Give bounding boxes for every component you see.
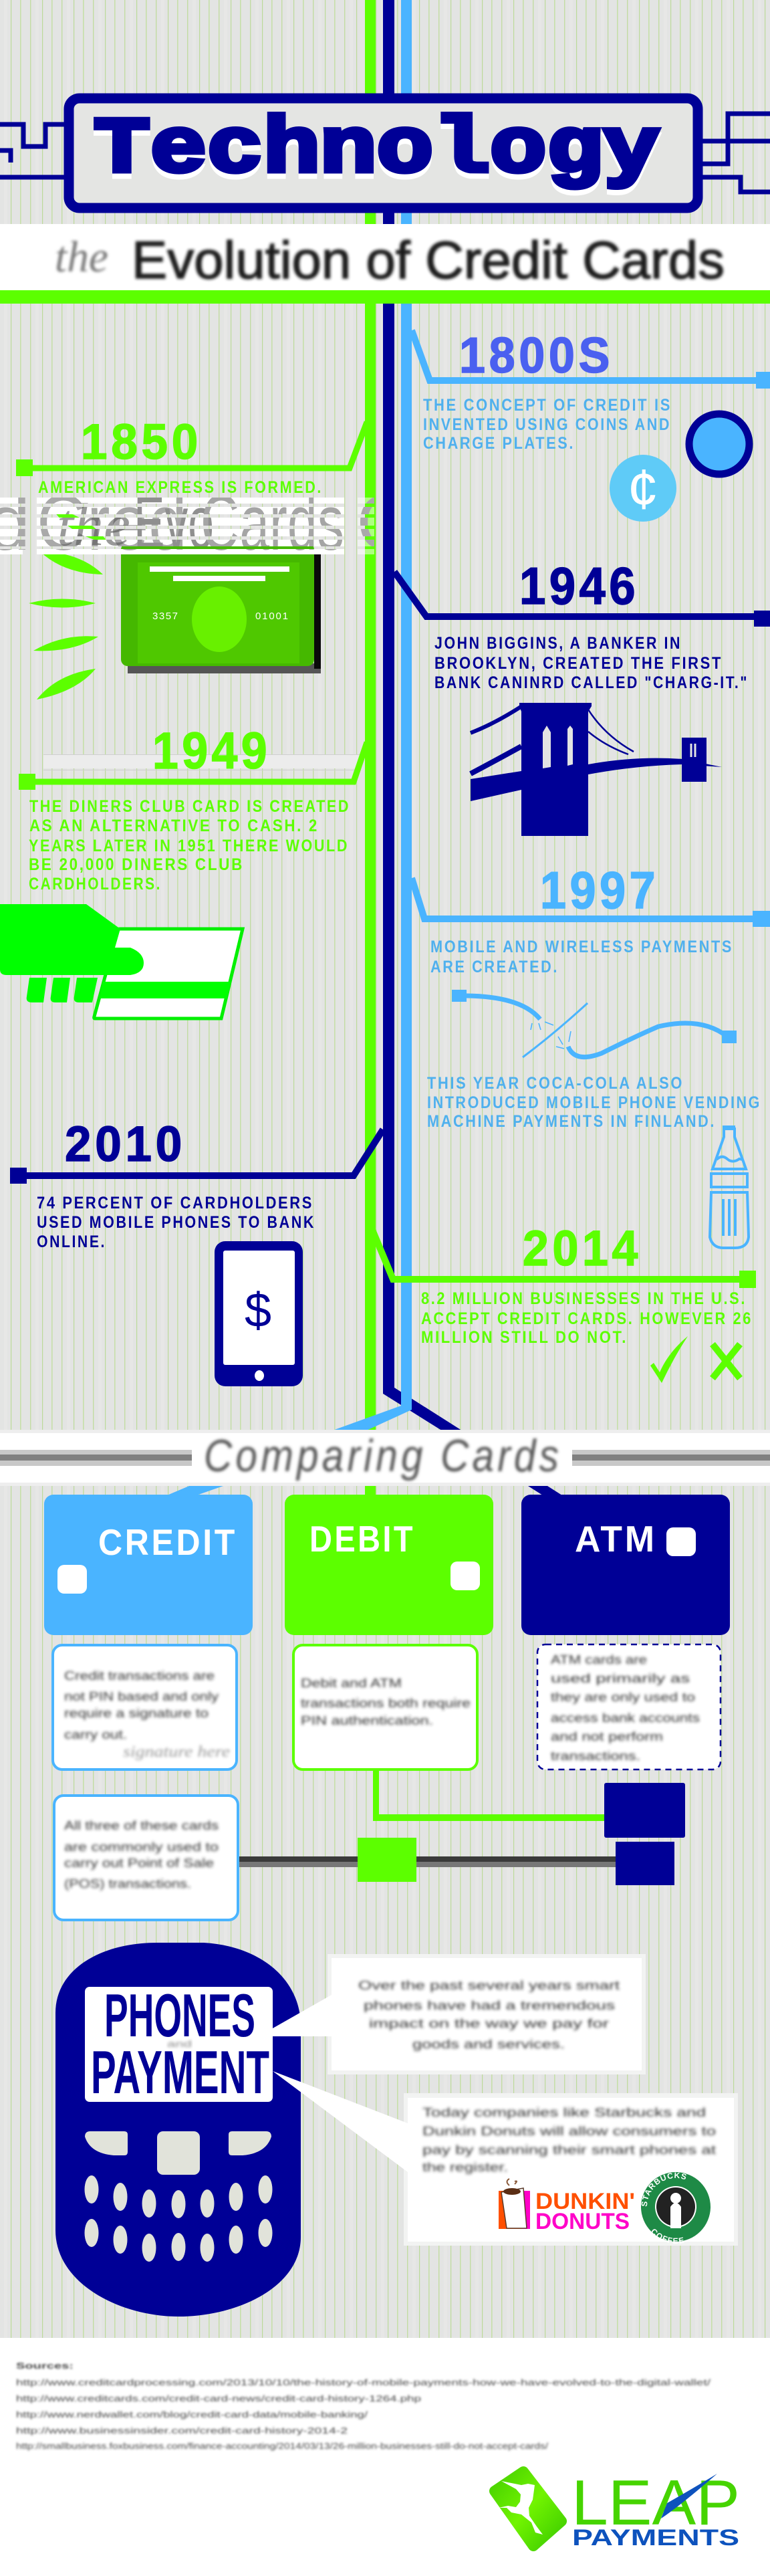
callout: smart phones impact: impact on the way we pay for [369,2017,609,2030]
icon: brooklyn bridge [471,703,722,836]
event: 1997 [412,861,770,1131]
callout: smart phones impact: phones have had a tremendous [364,1999,615,2012]
event: 1949: 1949 [152,722,271,780]
icon: american express card: 01001 [255,611,288,622]
subtitle band: Evolution of Credit Cards [132,230,725,290]
garbled overlay text: Evo [134,481,214,564]
card: credit: CREDIT [98,1521,237,1563]
phone illustration [55,1943,301,2317]
event: 1946: JOHN BIGGINS, A BANKER IN [434,634,682,653]
callout: starbucks and dunkin: the register. [422,2161,508,2174]
info box: credit: not PIN based and only [64,1690,219,1703]
icon: check mark [650,1336,688,1383]
event: 1850: 1850 [81,414,202,469]
event: 1997: 1997 [540,861,659,920]
callout: smart phones impact [273,1954,646,2074]
info box: all three: carry out Point of Sale [64,1856,214,1870]
info box: all three: are commonly used to [64,1840,219,1854]
icon: american express card [121,543,321,673]
phones and payment label: and [167,2038,192,2049]
callout: starbucks and dunkin: Today companies like Starbucks and [422,2106,706,2119]
event: 1946: BROOKLYN, CREATED THE FIRST [434,654,723,673]
event: 1800s: THE CONCEPT OF CREDIT IS [423,396,672,415]
event: 1800s [412,327,770,453]
garbled overlay text: Cards [201,479,344,567]
sources: http://smallbusiness.foxbusiness.com/finance-accounting/2014/03/13/26-million-businesses-still-do-not-accept-cards/ [16,2441,548,2451]
event: 2010: 2010 [65,1116,186,1172]
info box: all three: (POS) transactions. [64,1877,191,1891]
title box: Technology [94,112,660,201]
event: 1949: BE 20,000 DINERS CLUB [29,855,244,874]
info box: credit [53,1645,237,1769]
event: 2014 [369,1220,756,1347]
event: 1997: ARE CREATED. [430,958,559,976]
logo: starbucks coffee: STARBUCKS [642,2172,686,2207]
circuit traces right [702,114,770,192]
event: 2010: ONLINE. [37,1232,106,1251]
phones and payment label: PAYMENT [91,2039,269,2107]
info box: debit: transactions both require [301,1697,471,1710]
event: 2010 [10,1116,383,1251]
info box: atm: and not perform [551,1730,663,1743]
event: 1800s: INVENTED USING COINS AND [423,415,671,434]
info box: all three: All three of these cards [64,1819,219,1832]
garbled overlay text: the [57,492,130,558]
event: 1949: AS AN ALTERNATIVE TO CASH. 2 [29,817,319,835]
info box: credit: Credit transactions are [64,1669,215,1683]
sources: http://www.businessinsider.com/credit-card-history-2014-2 [16,2426,348,2436]
info box: atm: they are only used to [551,1691,695,1704]
info box: debit [293,1645,477,1769]
pos line [239,1856,616,1867]
logo: leap payments: LEAP [571,2467,740,2539]
icon: x mark [713,1344,740,1378]
section header band: comparing cards [0,1430,770,1486]
logo: starbucks coffee: COFFEE [652,2229,684,2244]
subtitle band [0,224,770,304]
icon: cent coin [610,455,676,522]
callout: starbucks and dunkin [273,2071,738,2246]
block: navy atm lower [616,1842,674,1885]
info box: atm [537,1644,721,1769]
event: 1850: AMERICAN EXPRESS IS FORMED. [38,478,323,497]
block: navy atm upper [604,1783,685,1838]
logo: dunkin donuts: DONUTS [535,2209,630,2234]
icon: coke bottle [710,1127,749,1248]
card: debit: DEBIT [309,1518,415,1560]
garbled overlay text: Cred [37,479,187,567]
phones and payment label [85,1982,273,2107]
info box: atm: used primarily as [551,1672,690,1685]
phones and payment label: PHONES [104,1982,255,2050]
icon: hand holding card [0,904,243,1018]
logo: dunkin donuts: DUNKIN' [535,2189,635,2214]
info box: atm: access bank accounts [551,1711,700,1725]
sources [16,2361,711,2451]
event: 1850 [16,414,367,497]
event: 1997: MACHINE PAYMENTS IN FINLAND. [427,1112,716,1131]
event: 1800s: CHARGE PLATES. [423,434,575,453]
logo: leap payments: PAYMENTS [572,2525,739,2551]
sources: http://www.nerdwallet.com/blog/credit-card-data/mobile-banking/ [16,2409,368,2420]
icon: rays around card [29,508,108,700]
sources: http://www.creditcardprocessing.com/2013/10/10/the-history-of-mobile-payments-how-we-have-evolved-to-the-digital-wallet/ [16,2377,711,2387]
icon: smartphone [215,1241,303,1386]
timeline trunk lines [329,0,464,1498]
info box: debit: Debit and ATM [301,1677,402,1690]
info box: atm: ATM cards are [551,1653,647,1667]
callout: smart phones impact: goods and services. [412,2038,565,2051]
info box: credit: require a signature to [64,1707,209,1720]
subtitle band: the [55,233,108,282]
icon: american express card: 3357 [152,611,178,622]
icon: disconnected wires [452,990,737,1057]
icon: coin navy ring [689,414,749,474]
logo: leap payments [495,2467,740,2551]
block: green pos terminal [358,1838,416,1882]
event: 1949 [19,722,367,893]
connector stubs below band [167,1486,562,1495]
info box: credit: signature here [123,1743,230,1761]
sources: Sources: [16,2361,74,2371]
event: 1800s: 1800S [459,327,614,383]
info box: credit: carry out. [64,1728,127,1741]
green connector to atm block [373,1771,604,1821]
event: 2014: MILLION STILL DO NOT. [421,1328,628,1347]
event: 1946: 1946 [519,556,639,615]
event: 1949: YEARS LATER IN 1951 THERE WOULD [29,837,349,855]
card: atm: ATM [575,1518,657,1560]
logo: dunkin donuts [499,2179,635,2234]
callout: starbucks and dunkin: pay by scanning their smart phones at [422,2143,716,2157]
event: 2010: USED MOBILE PHONES TO BANK [37,1213,315,1232]
card: debit [285,1495,493,1635]
sources: http://www.creditcards.com/credit-card-news/credit-card-history-1264.php [16,2393,421,2403]
icon: smartphone: $ [245,1284,271,1337]
circuit traces left [0,124,64,177]
card: credit [44,1495,253,1635]
phone keys [84,2131,273,2262]
event: 1997: THIS YEAR COCA-COLA ALSO [427,1074,684,1093]
garbled overlay text [0,498,374,554]
title box: Technology [94,106,660,195]
section header band: comparing cards: Comparing Cards [204,1430,562,1481]
logo: starbucks coffee [641,2172,711,2244]
callout: smart phones impact: Over the past several years smart [358,1979,620,1992]
icon: cent coin: ¢ [628,457,658,520]
event: 2010: 74 PERCENT OF CARDHOLDERS [37,1194,313,1212]
event: 1949: CARDHOLDERS. [29,875,162,893]
card: atm [521,1495,730,1635]
info box: debit: PIN authentication. [301,1714,433,1727]
event: 2014: 2014 [523,1220,642,1276]
info box: atm: transactions. [551,1749,640,1763]
event: 1949: THE DINERS CLUB CARD IS CREATED [29,797,350,816]
event: 1946 [394,556,770,692]
info box: all three [54,1796,238,1920]
title box [69,98,698,208]
event: 1997: MOBILE AND WIRELESS PAYMENTS [430,938,733,956]
callout: starbucks and dunkin: Dunkin Donuts will allow consumers to [422,2125,716,2138]
garbled overlay text: C [356,479,413,567]
